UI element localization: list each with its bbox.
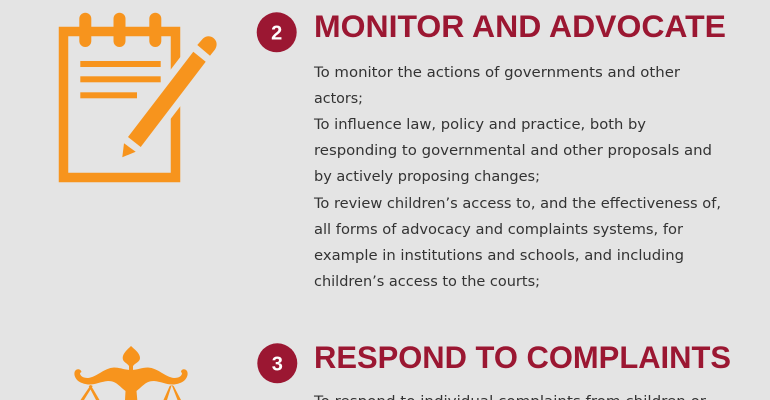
text block: monitor and advocate duties: by actively proposing changes; [314, 169, 540, 185]
number badge 2: 2 [271, 22, 282, 44]
text block: monitor and advocate duties: example in institutions and schools, and including [314, 248, 684, 264]
text block: monitor and advocate duties: To influence law, policy and practice, both by [313, 117, 646, 133]
heading: respond to complaints: RESPOND TO COMPLAINTS [314, 339, 731, 375]
heading: monitor and advocate: MONITOR AND ADVOCATE [314, 8, 726, 44]
text block: monitor and advocate duties [313, 65, 721, 290]
text block: monitor and advocate duties: children’s access to the courts; [314, 274, 540, 290]
text block: monitor and advocate duties: To review children’s access to, and the effectiveness of, [313, 196, 721, 212]
text block: monitor and advocate duties: all forms of advocacy and complaints systems, for [314, 222, 683, 238]
text block: monitor and advocate duties: responding to governmental and other proposals and [314, 143, 712, 159]
number badge 2 [257, 12, 297, 52]
icon: notepad and pencil [64, 13, 217, 178]
text block: monitor and advocate duties: To monitor the actions of governments and other [313, 65, 680, 81]
number badge 3 [257, 343, 297, 383]
text block: monitor and advocate duties: actors; [314, 91, 363, 107]
icon: scales of justice [74, 346, 188, 400]
number badge 3: 3 [272, 354, 283, 376]
